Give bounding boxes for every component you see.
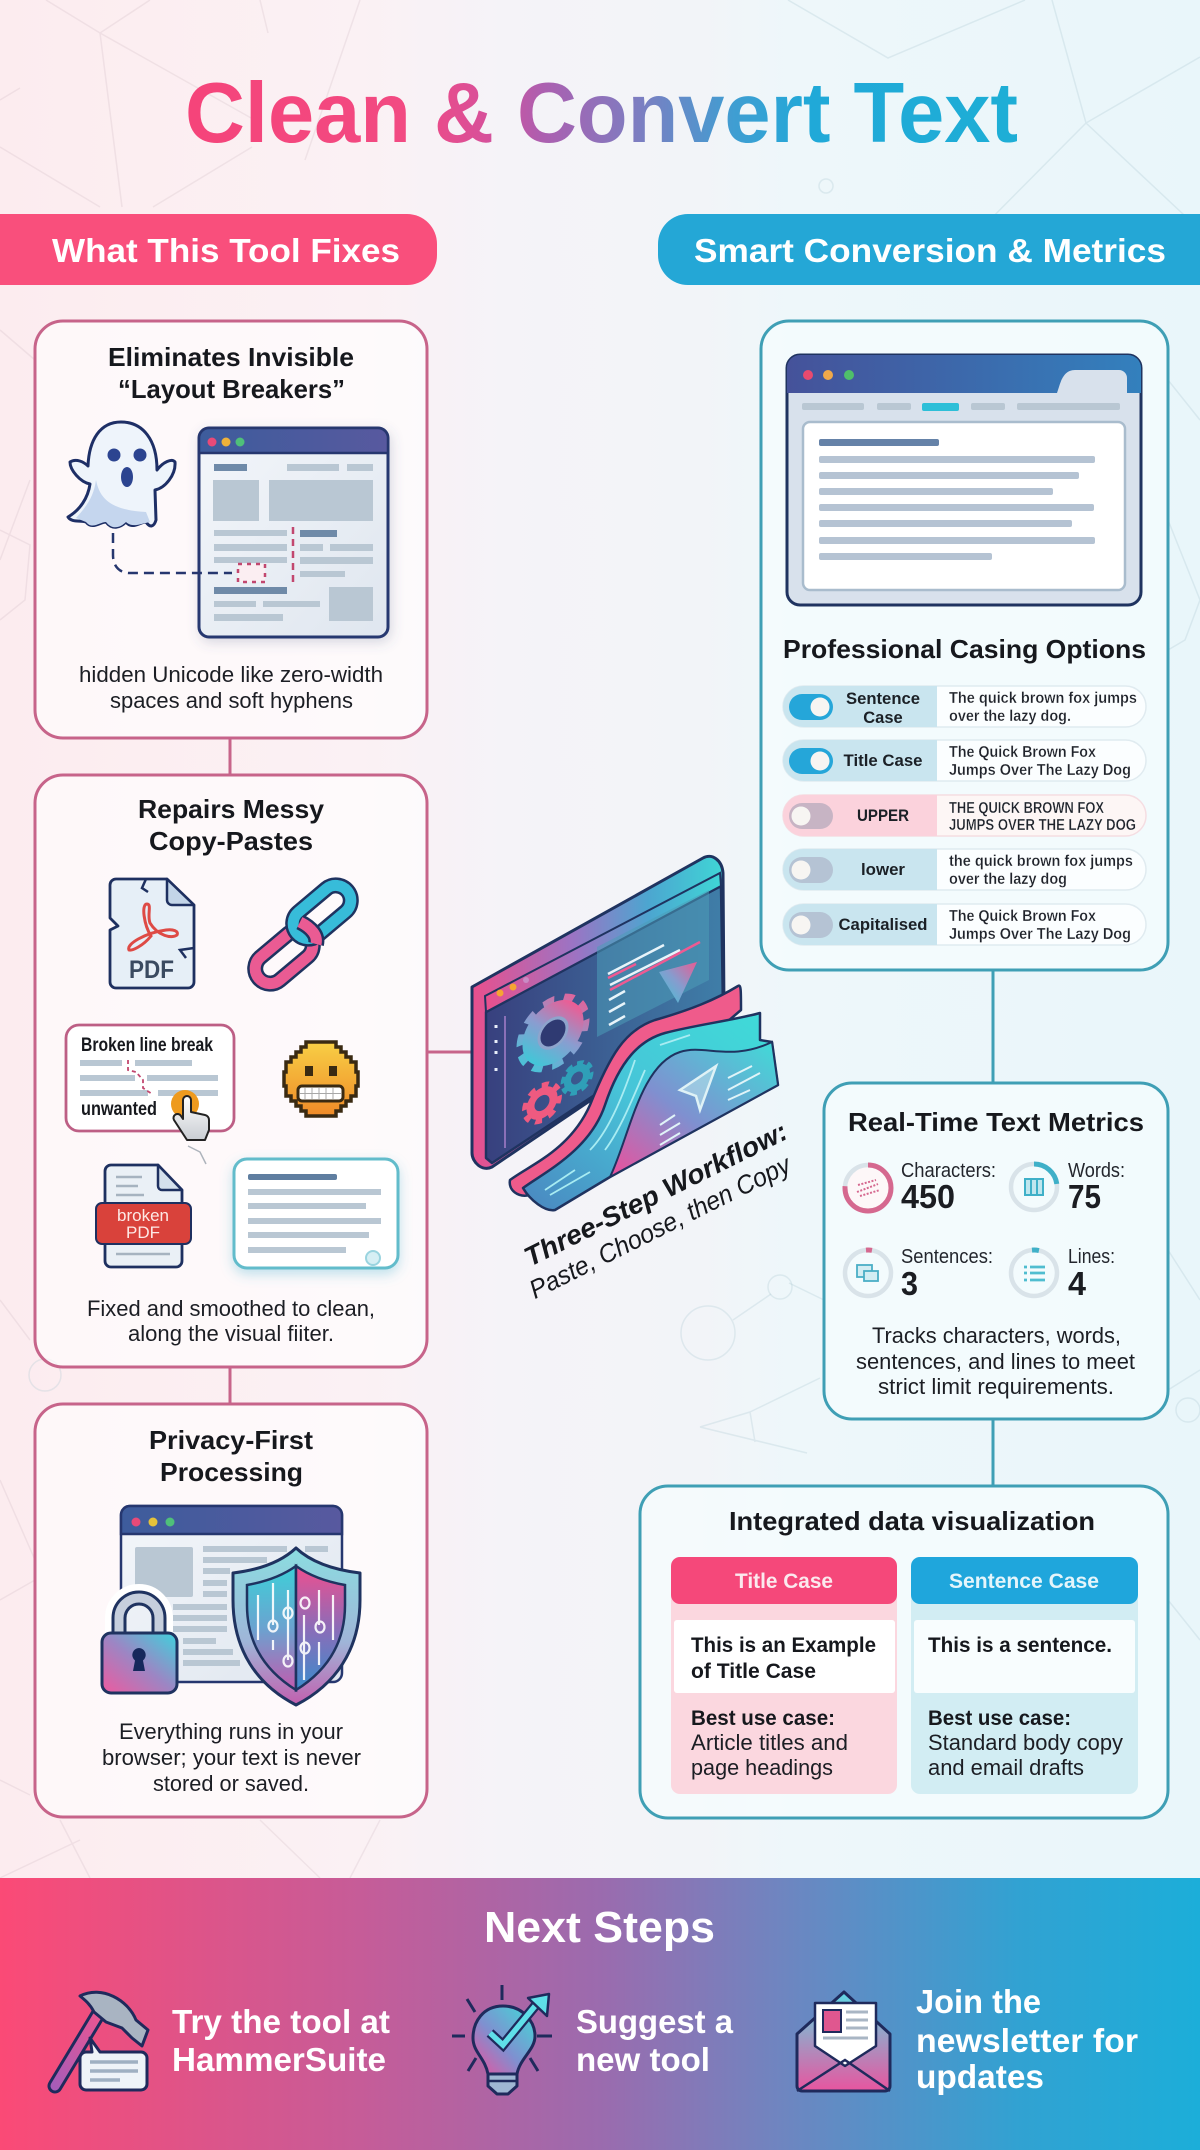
metric: characters: Characters: (901, 1160, 996, 1182)
step: suggest: Suggest a (576, 2003, 734, 2040)
step: newsletter (916, 1983, 1138, 2095)
option: capitalised: The Quick Brown Fox (949, 908, 1096, 925)
column: sentence case: Standard body copy (928, 1730, 1123, 1755)
metric: sentences: Sentences: (901, 1246, 993, 1268)
heading: Privacy-First (149, 1425, 313, 1455)
icon: padlock (102, 1593, 177, 1693)
body text: strict limit requirements. (878, 1374, 1114, 1399)
step: hammer (55, 1992, 148, 2090)
panel: integrated data visualization (640, 1486, 1168, 1818)
heading: Professional Casing Options (783, 634, 1146, 664)
body text: Fixed and smoothed to clean, (87, 1296, 375, 1321)
option: title case: Title Case (844, 752, 922, 770)
gears (523, 991, 583, 1075)
step: suggest: new tool (576, 2041, 710, 2078)
heading: Next Steps (484, 1903, 715, 1952)
metric: words: 75 (1068, 1178, 1101, 1215)
panel: text metrics (824, 1083, 1168, 1419)
column: title case: Best use case: (691, 1706, 835, 1730)
browser window (121, 1506, 342, 1682)
footer: next steps (0, 1878, 1200, 2150)
icon: shield (233, 1548, 360, 1705)
metric: lines: 4 (1068, 1265, 1087, 1302)
option: sentence case: over the lazy dog. (949, 708, 1071, 725)
metric: sentences (843, 1246, 993, 1302)
step: envelope (797, 1992, 890, 2091)
icon: broken PDF document: broken (117, 1206, 169, 1225)
icon: broken PDF document: PDF (126, 1223, 160, 1242)
icon: grimace emoji (284, 1042, 358, 1116)
workflow illustration (472, 856, 778, 1210)
right section pill (658, 214, 1200, 285)
heading: Eliminates Invisible (108, 342, 354, 372)
heading: Processing (160, 1457, 303, 1487)
right section pill: Smart Conversion & Metrics (694, 232, 1166, 269)
body text: browser; your text is never (102, 1745, 361, 1770)
column: sentence case: Sentence Case (949, 1570, 1099, 1593)
step: newsletter: updates (916, 2058, 1044, 2095)
metric: lines (1009, 1246, 1115, 1302)
step: try the tool (172, 2003, 390, 2078)
step: try the tool: Try the tool at (172, 2003, 390, 2040)
column: sentence case: Best use case: (928, 1706, 1071, 1730)
column: title case: Title Case (735, 1570, 833, 1593)
body text: spaces and soft hyphens (110, 688, 353, 713)
icon: chain link (249, 879, 357, 990)
column: sentence case: This is a sentence. (928, 1633, 1112, 1657)
column: title case (671, 1557, 897, 1794)
metric: characters: 450 (901, 1178, 955, 1215)
workflow caption: Three-Step Workflow: (519, 1116, 792, 1272)
column: sentence case (911, 1557, 1138, 1794)
option: sentence case (783, 686, 1146, 727)
heading: Real-Time Text Metrics (848, 1107, 1144, 1137)
body text: Everything runs in your (119, 1719, 343, 1744)
body text: sentences, and lines to meet (856, 1349, 1135, 1374)
column: title case: page headings (691, 1755, 833, 1780)
browser window with hidden characters (113, 428, 388, 637)
body text: stored or saved. (153, 1771, 309, 1796)
heading: “Layout Breakers” (118, 374, 345, 404)
broken line break card (66, 1025, 234, 1164)
body text: Tracks characters, words, (872, 1323, 1121, 1348)
body text: hidden Unicode like zero-width (79, 662, 383, 687)
metric: words: Words: (1068, 1160, 1125, 1182)
step: light bulb (452, 1985, 552, 2094)
option: capitalised: Capitalised (838, 916, 928, 934)
ribbons (510, 986, 741, 1196)
clean text card (234, 1159, 398, 1268)
body text (87, 1296, 375, 1346)
heading (108, 342, 354, 404)
workflow caption: Paste, Choose, then Copy (524, 1148, 797, 1305)
broken line break card: unwanted (81, 1099, 157, 1120)
broken line break card: Broken line break (81, 1035, 213, 1056)
step: newsletter: newsletter for (916, 2022, 1138, 2059)
body text (856, 1323, 1135, 1399)
heading (149, 1425, 313, 1487)
left section pill: What This Tool Fixes (52, 232, 400, 269)
column: sentence case: and email drafts (928, 1755, 1084, 1780)
option: capitalised (783, 904, 1146, 945)
icon: cracked PDF: PDF (129, 956, 174, 984)
option: lower: lower (861, 861, 906, 879)
option: upper (783, 795, 1146, 836)
panel: invisible layout breakers (35, 321, 427, 738)
option: title case (783, 740, 1146, 781)
panel: casing options (761, 321, 1168, 970)
option: lower: the quick brown fox jumps (949, 853, 1133, 870)
option: sentence case: Case (863, 709, 903, 727)
option: sentence case: The quick brown fox jumps (949, 690, 1137, 707)
left section pill (0, 214, 437, 285)
heading (138, 794, 325, 856)
step: newsletter: Join the (916, 1983, 1041, 2020)
column: title case: This is an Example (691, 1633, 876, 1657)
body text (102, 1719, 361, 1796)
icon: cracked PDF (110, 879, 194, 988)
column: title case: Article titles and (691, 1730, 848, 1755)
option: lower: over the lazy dog (949, 871, 1067, 888)
metric: sentences: 3 (901, 1265, 918, 1302)
option: capitalised: Jumps Over The Lazy Dog (949, 926, 1131, 943)
heading: Integrated data visualization (729, 1506, 1095, 1536)
body text: along the visual fiiter. (128, 1321, 334, 1346)
title: Clean & Convert Text (185, 66, 1018, 161)
body text (79, 662, 383, 713)
option: title case: The Quick Brown Fox (949, 744, 1096, 761)
option: title case: Jumps Over The Lazy Dog (949, 762, 1131, 779)
icon: ghost (68, 422, 175, 527)
metric: words (1011, 1160, 1125, 1215)
metric: characters (845, 1160, 996, 1215)
option: upper: UPPER (857, 807, 909, 825)
option: lower (783, 849, 1146, 890)
option: upper: JUMPS OVER THE LAZY DOG (949, 817, 1136, 834)
panel: privacy-first (35, 1404, 427, 1817)
panel: messy copy-pastes (35, 775, 427, 1367)
column: title case: of Title Case (691, 1659, 816, 1683)
option: sentence case: Sentence (846, 690, 920, 708)
heading: Copy-Pastes (149, 826, 313, 856)
app window (787, 355, 1141, 605)
metric: lines: Lines: (1068, 1246, 1115, 1268)
step: suggest (576, 2003, 734, 2078)
option: upper: THE QUICK BROWN FOX (949, 800, 1105, 817)
step: try the tool: HammerSuite (172, 2041, 386, 2078)
icon: broken PDF document (96, 1165, 191, 1267)
heading: Repairs Messy (138, 794, 325, 824)
